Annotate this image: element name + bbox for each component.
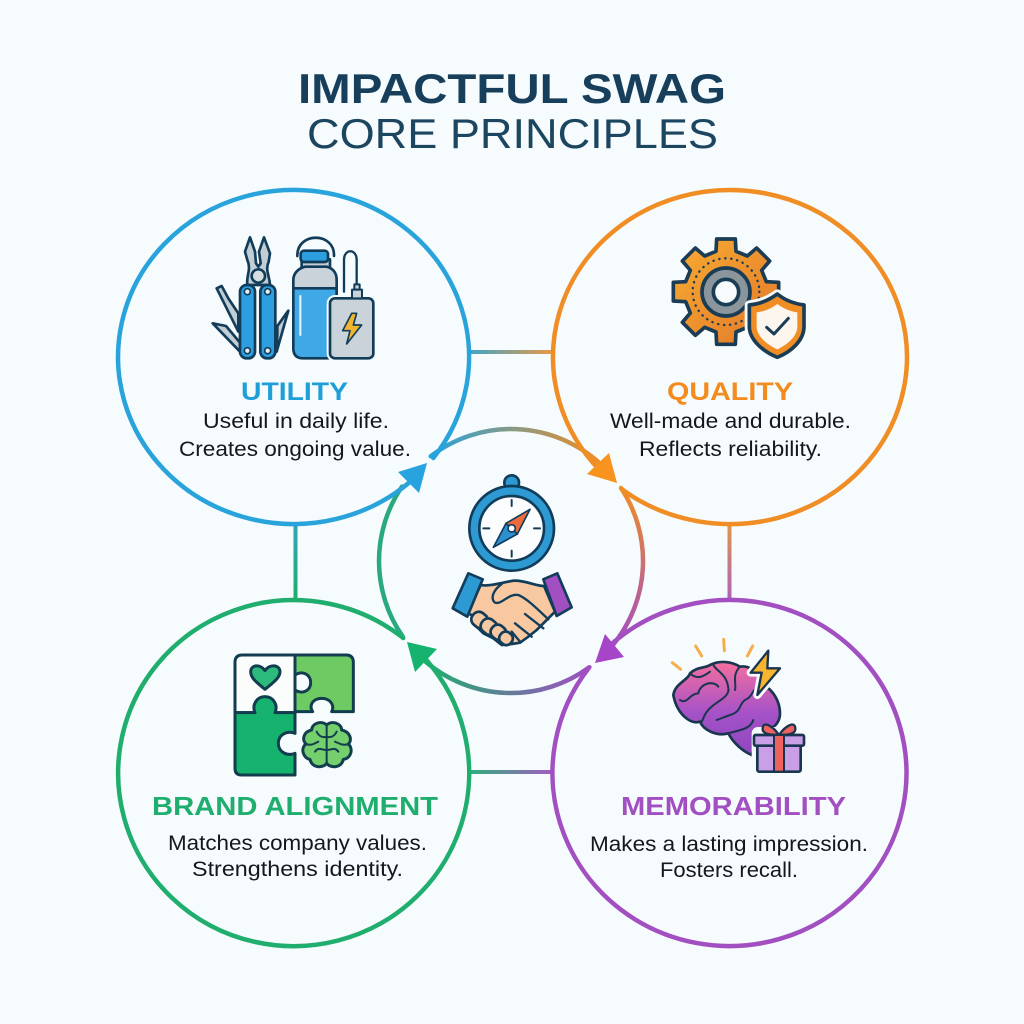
memorability circle [552, 600, 906, 946]
quality circle [553, 190, 907, 524]
panel: brand alignment [118, 600, 469, 946]
arrow: brand alignment [407, 642, 437, 672]
arrow: quality [587, 453, 617, 483]
heading: quality: QUALITY [667, 378, 793, 406]
panel: utility [118, 190, 469, 524]
text: memorability description: Fosters recall. [660, 859, 798, 882]
connector: brand alignment to memorability [469, 770, 553, 774]
heading: utility: UTILITY [241, 378, 348, 406]
text: quality description [610, 410, 851, 461]
text: brand alignment description: Strengthens identity. [192, 858, 403, 881]
icon: brain, lightning and gift [672, 639, 804, 772]
text: memorability description: Makes a lasting impression. [590, 833, 868, 856]
icon: compass and handshake [453, 475, 572, 647]
icon: multitool, bottle and power bank [213, 237, 373, 358]
brand alignment circle [118, 600, 469, 946]
icon: puzzle, heart and brain [235, 655, 353, 775]
title: IMPACTFUL SWAG [298, 65, 726, 112]
text: quality description: Well-made and durable. [610, 410, 851, 433]
text: utility description [179, 410, 411, 461]
arrow: memorability [595, 634, 624, 663]
title: CORE PRINCIPLES [307, 110, 718, 157]
center ring arcs [379, 429, 643, 693]
text: utility description: Creates ongoing value. [179, 438, 411, 461]
text: brand alignment description [168, 832, 427, 881]
text: quality description: Reflects reliability. [639, 438, 822, 461]
utility circle [118, 190, 469, 524]
arrow: utility [398, 463, 427, 493]
connector: quality to memorability [728, 524, 732, 600]
heading: memorability: MEMORABILITY [621, 791, 846, 821]
text: brand alignment description: Matches company values. [168, 832, 427, 855]
icon: gear and shield [673, 239, 804, 357]
panel: memorability [552, 600, 906, 946]
title [298, 65, 726, 157]
text: memorability description [590, 833, 868, 882]
connector: utility to quality [469, 350, 553, 354]
heading: brand alignment: BRAND ALIGNMENT [152, 791, 438, 821]
text: utility description: Useful in daily life. [203, 410, 389, 433]
connector: utility to brand alignment [294, 524, 298, 600]
panel: quality [553, 190, 907, 524]
